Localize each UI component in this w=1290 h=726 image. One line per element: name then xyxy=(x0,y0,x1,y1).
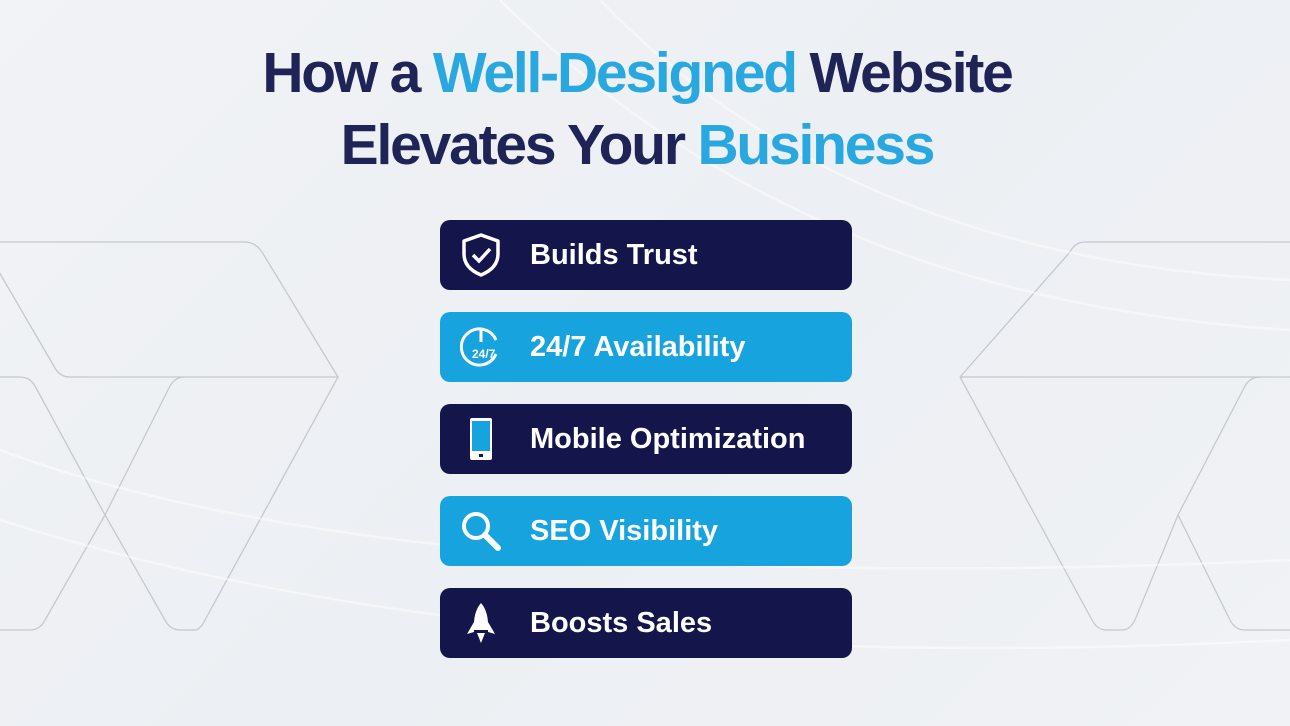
title line 2: Elevates Your Business xyxy=(341,113,933,177)
icon: rocket xyxy=(467,603,495,643)
item: Builds Trust: Builds Trust xyxy=(530,239,698,271)
icon: phone xyxy=(470,418,492,460)
item: 24/7 Availability xyxy=(440,312,852,382)
icon: clock 24/7: 24/7 xyxy=(472,347,496,361)
item: SEO Visibility: SEO Visibility xyxy=(530,515,718,547)
item: Boosts Sales xyxy=(440,588,852,658)
item: Mobile Optimization xyxy=(440,404,852,474)
title line 1: How a Well-Designed Website xyxy=(262,41,1012,105)
icon: magnifier xyxy=(462,512,501,551)
icon: clock 24/7 xyxy=(460,327,498,367)
item: SEO Visibility xyxy=(440,496,852,566)
item: Boosts Sales: Boosts Sales xyxy=(530,607,712,639)
item: Mobile Optimization: Mobile Optimization xyxy=(530,423,806,455)
item: Builds Trust xyxy=(440,220,852,290)
item: 24/7 Availability: 24/7 Availability xyxy=(530,331,745,363)
icon: shield xyxy=(462,233,500,277)
